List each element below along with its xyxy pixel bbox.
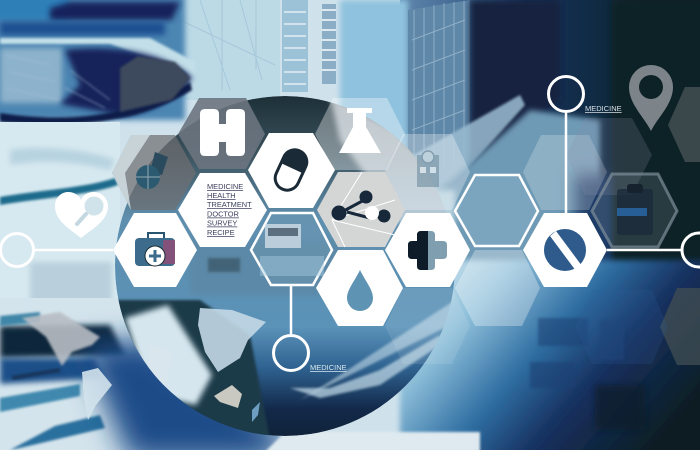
bus photo in street — [208, 258, 240, 272]
word list text: HEALTH — [207, 191, 236, 200]
icon: location pin — [629, 65, 673, 131]
icon: clipboard cross — [417, 151, 439, 187]
hexagon: hospital H — [178, 98, 265, 169]
hexagon: flask — [339, 108, 381, 153]
barcode stripes — [282, 0, 336, 92]
continent: asia — [198, 308, 266, 372]
connector lines — [34, 111, 681, 335]
icon: stethoscope bottle — [136, 152, 168, 189]
icon: H — [200, 109, 245, 156]
hexagon: drop — [316, 250, 403, 326]
node circle: left — [0, 234, 34, 266]
hexagon: faint right column — [566, 87, 700, 365]
hexagon: word list — [178, 173, 267, 247]
hexagon: plus — [385, 213, 470, 287]
icon: heart with magnifier — [55, 192, 108, 238]
buildings — [395, 0, 700, 300]
hexagon: no sign — [523, 213, 607, 287]
word list text — [207, 182, 252, 237]
word list text: SURVEY — [207, 218, 237, 228]
hexagon: bus outline — [251, 213, 332, 285]
icon: first aid kit — [135, 233, 175, 266]
hexagon: capsule — [248, 133, 335, 208]
word list text: RECIPE — [207, 228, 235, 237]
continent: africa — [148, 368, 164, 385]
continent: australia — [214, 385, 242, 408]
hexagon: clipboard — [592, 174, 677, 247]
continent: north america — [22, 312, 100, 366]
bus photo — [260, 224, 324, 276]
node circle: bottom — [274, 336, 308, 370]
icon: prohibited pill — [544, 229, 586, 271]
hexagon: molecule — [317, 172, 405, 247]
hexagon: faint backdrop row — [315, 98, 607, 364]
icon: capsule — [271, 146, 311, 194]
continent: south america — [82, 368, 112, 420]
word list text: TREATMENT — [207, 200, 252, 209]
icon: water drop — [347, 270, 373, 311]
left pale area — [0, 122, 120, 305]
hexagon: bottle icon — [112, 135, 196, 210]
icon: clipboard — [617, 184, 653, 235]
land: new zealand — [252, 402, 260, 422]
label: medicine top: MEDICINE — [585, 104, 622, 113]
hexagon: medical kit — [113, 213, 197, 287]
bottom-right photo — [400, 260, 700, 450]
label: medicine bottom: MEDICINE — [310, 363, 347, 372]
word list text: MEDICINE — [207, 182, 243, 191]
icon: cross — [408, 231, 447, 270]
hexagon: empty outline — [455, 175, 538, 246]
node circle: right — [682, 233, 700, 267]
word list text: DOCTOR — [207, 210, 239, 218]
node circle: top — [548, 76, 584, 112]
globe — [115, 96, 454, 436]
top-left photo area — [0, 0, 195, 124]
icon: molecule — [332, 191, 390, 222]
rays — [332, 172, 395, 247]
bottom-left report bands — [0, 298, 480, 450]
